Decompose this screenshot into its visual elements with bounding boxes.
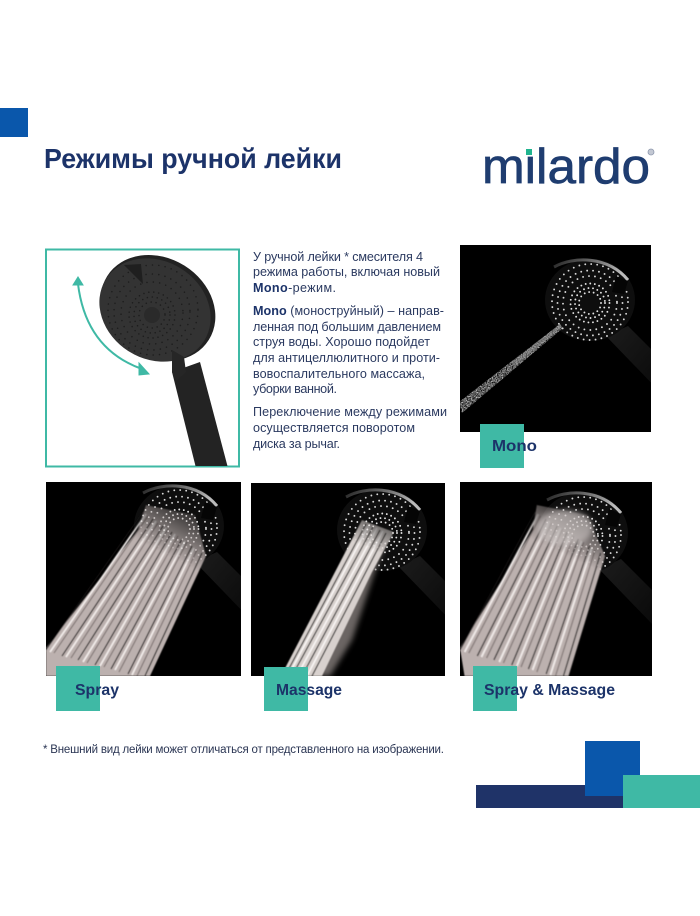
decorative blocks	[476, 741, 700, 808]
text block: description: струя воды. Хорошо подойдет	[253, 335, 430, 349]
photo: Spray mode	[45, 482, 251, 678]
text block: description: осуществляется поворотом	[253, 421, 415, 435]
decorative blue square	[0, 108, 28, 137]
text block: description: Mono (моноструйный) – направ-	[253, 304, 444, 318]
icon: black hand shower	[99, 255, 228, 466]
panel: shower head with rotation arrow	[46, 234, 239, 468]
text block: description	[253, 250, 447, 451]
label: Spray & Massage: Spray & Massage	[484, 682, 615, 699]
water stream	[281, 520, 394, 676]
footnote: * Внешний вид лейки может отличаться от представленного на изображении.	[43, 744, 444, 756]
icon: shower head	[545, 258, 651, 382]
title: Режимы ручной лейки	[44, 143, 342, 174]
label: Mono: Mono	[492, 438, 537, 455]
text block: description: ленная под большим давлением	[253, 320, 441, 334]
text block: description: Mono-режим.	[253, 281, 336, 295]
label: Mono	[480, 424, 537, 468]
photo: Mono mode	[459, 245, 662, 432]
text block: description: уборки ванной.	[253, 382, 337, 396]
label: Massage: Massage	[276, 682, 342, 699]
text block: description: для антицеллюлитного и проти-	[253, 351, 440, 365]
text block: description: режима работы, включая новый	[253, 265, 440, 279]
label: Massage	[264, 667, 342, 711]
photo: Massage mode	[251, 483, 454, 676]
text block: description: диска за рычаг.	[253, 437, 340, 451]
logo: milardo: milardo	[482, 140, 650, 194]
photo: Spray & Massage mode	[460, 482, 652, 676]
label: Spray	[56, 666, 119, 711]
text block: description: вовоспалительного массажа,	[253, 367, 425, 381]
text block: description: У ручной лейки * смесителя 4	[253, 250, 423, 264]
label: Spray: Spray	[75, 682, 119, 699]
water jet	[459, 324, 563, 413]
text block: description: Переключение между режимами	[253, 405, 447, 419]
arrow: rotation	[73, 277, 149, 375]
label: Spray & Massage	[473, 666, 615, 711]
